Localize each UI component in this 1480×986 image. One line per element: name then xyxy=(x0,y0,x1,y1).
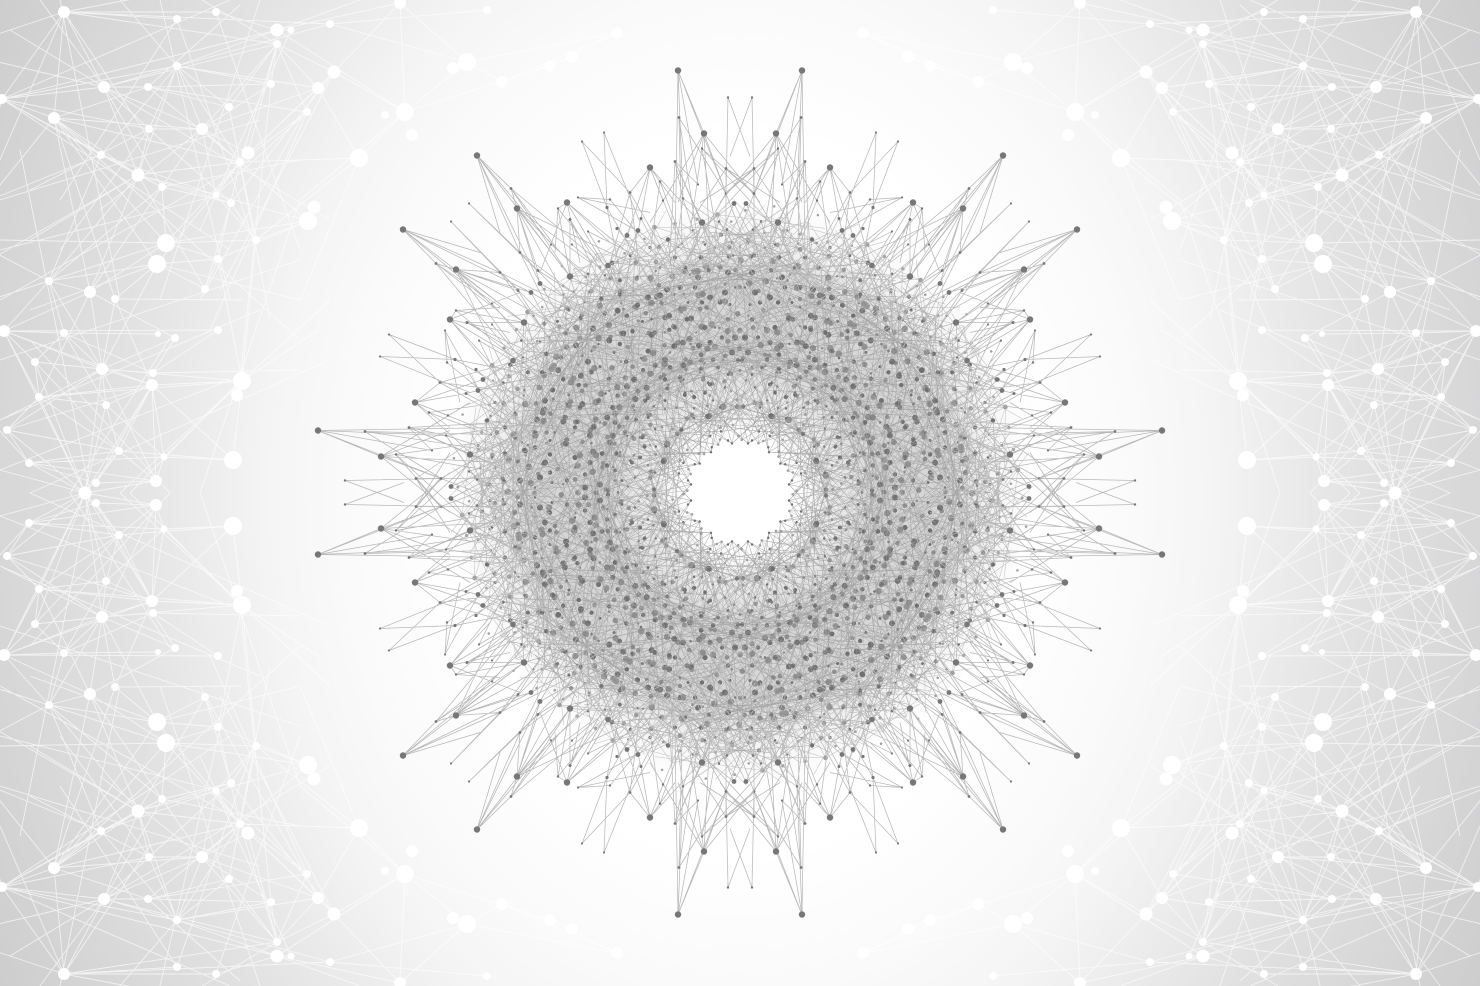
soft haze of the dense ring xyxy=(400,152,1080,832)
outer spikes with nodes xyxy=(315,67,1165,918)
central radial network sphere xyxy=(315,67,1165,918)
dense inner mesh ring xyxy=(368,120,1112,865)
